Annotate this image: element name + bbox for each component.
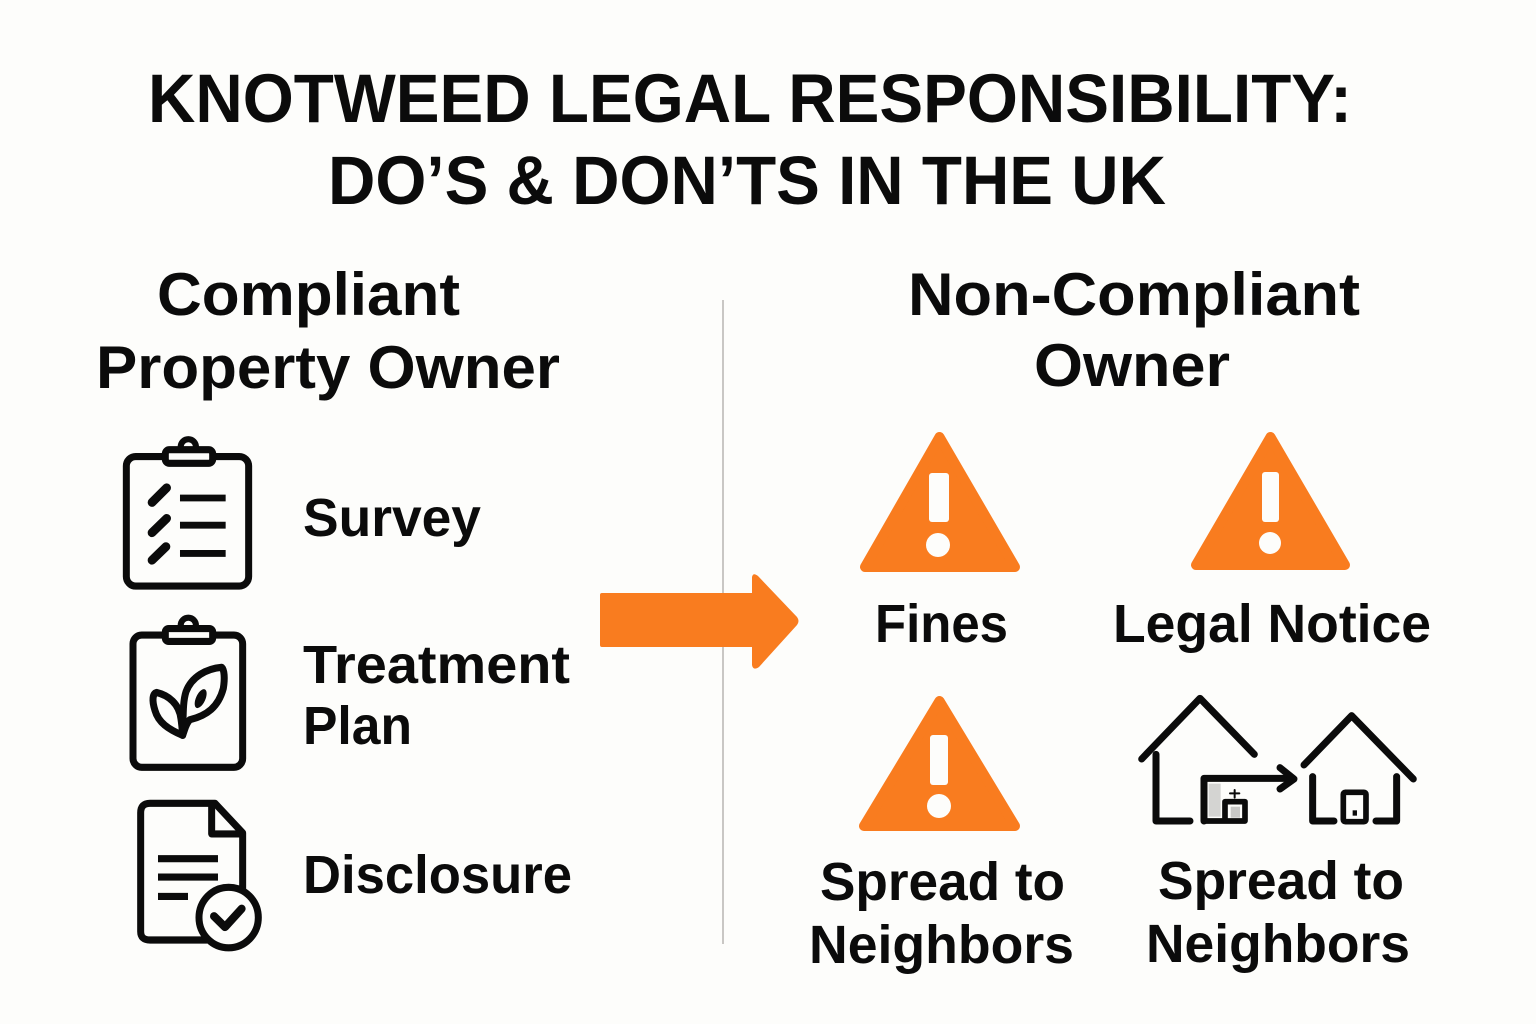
heading: compliant property owner: Compliant [157, 261, 460, 328]
icon: warning triangle, fines [865, 437, 1015, 567]
label: legal notice: Legal Notice [1113, 594, 1431, 654]
icon: treatment plan clipboard with leaf [133, 618, 243, 767]
heading: non-compliant owner: Non-Compliant [908, 261, 1360, 328]
heading: compliant property owner: Property Owner [96, 334, 560, 401]
title: DO’S & DON’TS IN THE UK [328, 142, 1166, 219]
label: spread to neighbors, right [1146, 851, 1410, 974]
label: disclosure: Disclosure [303, 845, 572, 905]
label: spread to neighbors, left: Spread to [820, 852, 1065, 912]
heading: compliant property owner [96, 261, 560, 401]
heading: non-compliant owner: Owner [1034, 332, 1230, 399]
icon: houses with spread arrow [1142, 698, 1413, 822]
title [148, 60, 1352, 219]
icon: warning triangle, legal notice [1196, 437, 1345, 565]
label: survey: Survey [303, 488, 481, 548]
heading: non-compliant owner [908, 261, 1360, 399]
label: fines: Fines [875, 594, 1008, 654]
label: treatment plan [303, 635, 570, 756]
title: KNOTWEED LEGAL RESPONSIBILITY: [148, 60, 1352, 137]
label: spread to neighbors, left: Neighbors [809, 915, 1074, 975]
label: treatment plan: Treatment [303, 635, 570, 695]
arrow: compliant to non-compliant [600, 574, 798, 669]
icon: warning triangle, spread to neighbors [864, 701, 1015, 826]
label: spread to neighbors, right: Spread to [1158, 851, 1404, 911]
label: treatment plan: Plan [303, 696, 412, 756]
label: spread to neighbors, right: Neighbors [1146, 914, 1410, 974]
icon: survey clipboard [126, 439, 249, 586]
label: spread to neighbors, left [809, 852, 1074, 975]
icon: disclosure document with check [141, 803, 258, 948]
